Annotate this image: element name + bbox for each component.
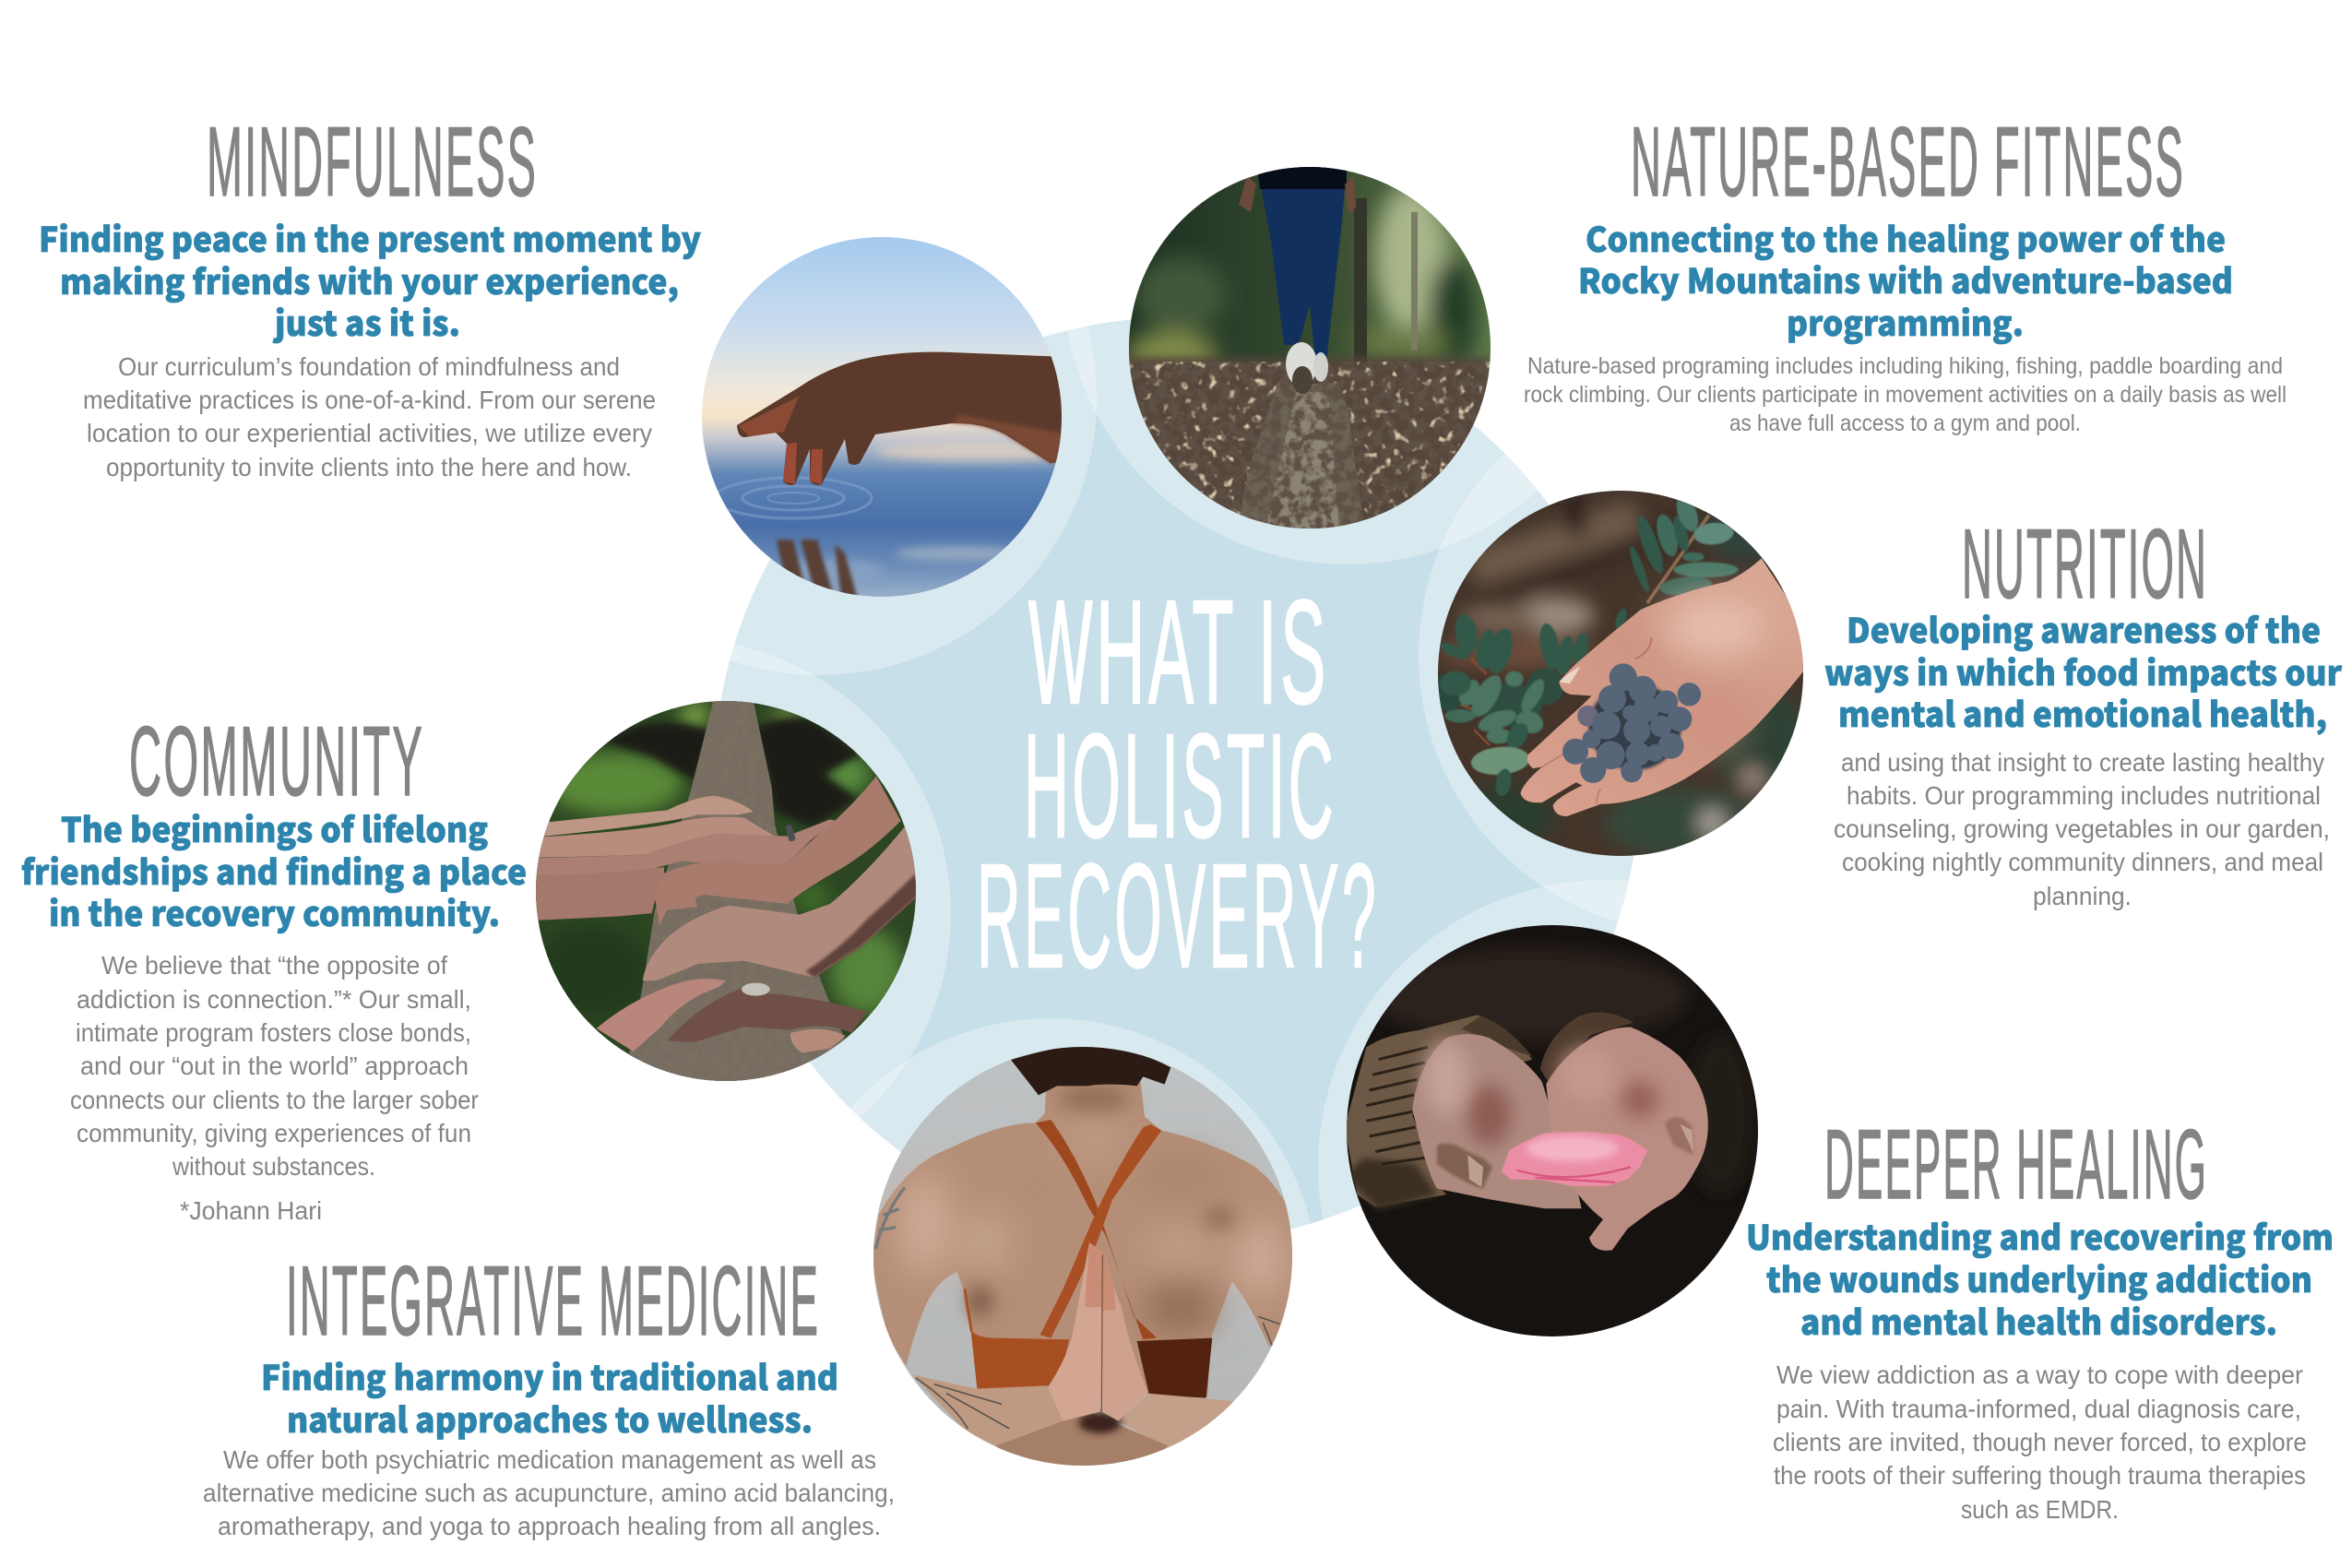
body text: community: connects our clients to the larger sober [70, 1086, 479, 1114]
subheading: deeper healing: and mental health disorders. [1800, 1295, 2277, 1345]
body text: deeper healing: We view addiction as a way to cope with deeper [1776, 1360, 2303, 1389]
subheading: community: friendships and finding a place [21, 845, 527, 895]
body text: nutrition: planning. [2033, 882, 2132, 910]
body text: mindfulness: location to our experiential activities, we utilize every [87, 419, 652, 447]
body text: nature-based fitness: rock climbing. Our clients participate in movement activities on a daily basis as well [1524, 382, 2287, 408]
photo: hand holding blueberries [1428, 486, 1811, 862]
body text: integrative medicine [203, 1445, 895, 1540]
subheading: integrative medicine: natural approaches to wellness. [287, 1393, 813, 1443]
subheading: deeper healing [1746, 1210, 2334, 1345]
title: what is holistic recovery: WHAT IS [1028, 569, 1329, 734]
body text: community: without substances. [172, 1152, 375, 1181]
body text: mindfulness: opportunity to invite clients into the here and how. [106, 453, 632, 481]
section: nature-based fitness [1524, 106, 2287, 436]
text: INTEGRATIVE MEDICINE [286, 1245, 820, 1356]
body text: deeper healing: pain. With trauma-informed, dual diagnosis care, [1776, 1395, 2301, 1423]
text: HOLISTIC [1024, 703, 1336, 868]
body text: integrative medicine: We offer both psychiatric medication management as well as [223, 1445, 876, 1474]
subheading: nutrition [1824, 603, 2343, 737]
subheading: community: The beginnings of lifelong [61, 802, 488, 852]
body text: community: addiction is connection.”* Our small, [77, 985, 471, 1014]
body text: mindfulness [83, 352, 656, 481]
body text: nutrition: and using that insight to create lasting healthy [1841, 748, 2324, 777]
subheading: nature-based fitness: Rocky Mountains with adventure-based [1578, 254, 2233, 303]
body text: integrative medicine: alternative medicine such as acupuncture, amino acid balancing, [203, 1479, 895, 1507]
body text: mindfulness: meditative practices is one-of-a-kind. From our serene [83, 386, 656, 414]
body text: community: and our “out in the world” approach [80, 1051, 469, 1080]
subheading: deeper healing: the wounds underlying addiction [1766, 1253, 2312, 1302]
body text: deeper healing: such as EMDR. [1961, 1495, 2119, 1524]
body text: nature-based fitness: as have full access to a gym and pool. [1729, 410, 2081, 436]
section: nutrition [1824, 508, 2343, 910]
section: community [21, 706, 527, 1225]
section: integrative medicine [203, 1245, 895, 1540]
section: deeper healing [1746, 1109, 2334, 1524]
body text: community: We believe that “the opposite of [101, 951, 447, 980]
body text: nature-based fitness: Nature-based programing includes including hiking, fishing, paddle boarding and [1527, 353, 2283, 379]
section: community: COMMUNITY [129, 706, 424, 816]
subheading: nutrition: ways in which food impacts our [1824, 646, 2343, 695]
body text: nutrition: habits. Our programming includes nutritional [1847, 781, 2321, 810]
title: what is holistic recovery [977, 569, 1379, 998]
body text: mindfulness: Our curriculum’s foundation of mindfulness and [118, 352, 620, 381]
photo: cupped hands holding a pink flower [1343, 922, 1762, 1341]
body text: deeper healing [1773, 1360, 2307, 1524]
subheading: integrative medicine: Finding harmony in traditional and [261, 1350, 838, 1400]
body text: deeper healing: clients are invited, though never forced, to explore [1773, 1428, 2307, 1456]
photo: woman's back with hands in reverse prayer [871, 1044, 1297, 1468]
subheading: community: in the recovery community. [49, 886, 500, 936]
body text: integrative medicine: aromatherapy, and yoga to approach healing from all angles. [218, 1512, 881, 1540]
subheading: mindfulness: Finding peace in the present moment by [39, 212, 701, 262]
body text: deeper healing: the roots of their suffering though trauma therapies [1774, 1461, 2306, 1490]
body text: nutrition: cooking nightly community dinners, and meal [1842, 848, 2323, 876]
subheading: nature-based fitness: programming. [1787, 296, 2024, 346]
subheading: mindfulness [39, 212, 701, 346]
subheading: deeper healing: Understanding and recovering from [1746, 1210, 2334, 1260]
subheading: mindfulness: making friends with your experience, [60, 255, 679, 304]
body text: community [70, 951, 479, 1181]
subheading: nature-based fitness: Connecting to the healing power of the [1586, 212, 2226, 262]
subheading: nature-based fitness [1578, 212, 2233, 346]
body text: nutrition [1834, 748, 2330, 910]
subheading: nutrition: Developing awareness of the [1847, 603, 2321, 653]
body text: nature-based fitness [1524, 353, 2287, 436]
photo: hand touching water [701, 236, 1079, 600]
photo: hands stacked on a tree trunk [529, 695, 929, 1098]
section: mindfulness [39, 106, 701, 481]
footnote: johann hari: *Johann Hari [180, 1196, 322, 1225]
text: RECOVERY? [977, 833, 1379, 998]
section: mindfulness: MINDFULNESS [207, 106, 538, 217]
central blue circle with pale rings [401, 0, 1976, 1553]
subheading: mindfulness: just as it is. [272, 296, 460, 346]
photo: person walking on a log in forest [1125, 167, 1491, 533]
body text: community: community, giving experiences of fun [77, 1119, 471, 1147]
subheading: nutrition: mental and emotional health, [1838, 687, 2327, 737]
body text: nutrition: counseling, growing vegetables in our garden, [1834, 814, 2330, 843]
body text: community: intimate program fosters close bonds, [76, 1018, 471, 1047]
subheading: community [21, 802, 527, 936]
subheading: integrative medicine [261, 1350, 838, 1443]
